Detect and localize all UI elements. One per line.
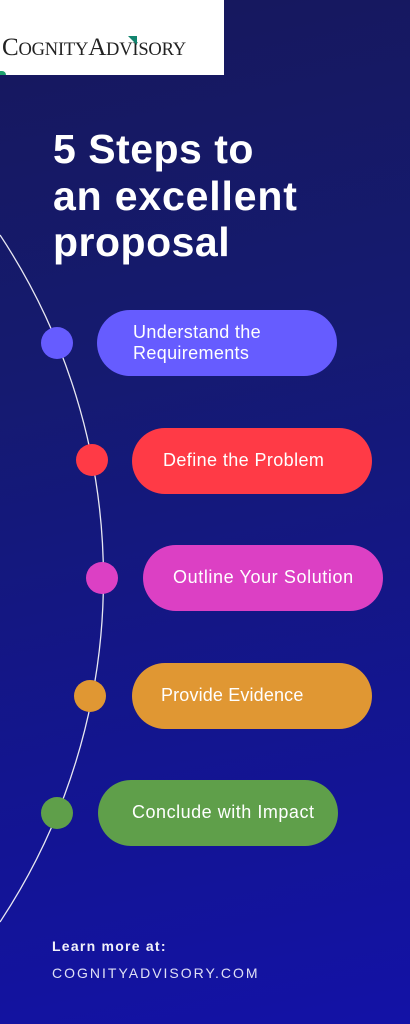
title: 5 Steps to (53, 126, 254, 172)
step 3 pill: Outline Your Solution (173, 567, 354, 587)
footer url: COGNITYADVISORY.COM (52, 965, 260, 981)
step 1 pill: Understand the (133, 322, 261, 342)
step 3 pill (143, 545, 383, 611)
step 5 pill: Conclude with Impact (132, 802, 314, 822)
step 2 pill: Define the Problem (163, 450, 324, 470)
step 2 dot (76, 444, 108, 476)
step 1 pill: Requirements (133, 343, 249, 363)
step 2 pill (132, 428, 372, 494)
logo teal accent (128, 36, 137, 45)
step 5 dot (41, 797, 73, 829)
step 4 dot (74, 680, 106, 712)
step 1 dot (41, 327, 73, 359)
step 4 pill (132, 663, 372, 729)
logo panel (0, 0, 224, 75)
step 3 dot (86, 562, 118, 594)
step 4 pill: Provide Evidence (161, 685, 303, 705)
logo wordmark: COGNITYADVISORY (2, 34, 186, 61)
title: proposal (53, 219, 230, 265)
title: an excellent (53, 172, 298, 218)
step 1 pill (97, 310, 337, 376)
logo green corner (0, 71, 6, 75)
step 5 pill (98, 780, 338, 846)
title (53, 126, 298, 265)
footer label: Learn more at: (52, 938, 167, 954)
